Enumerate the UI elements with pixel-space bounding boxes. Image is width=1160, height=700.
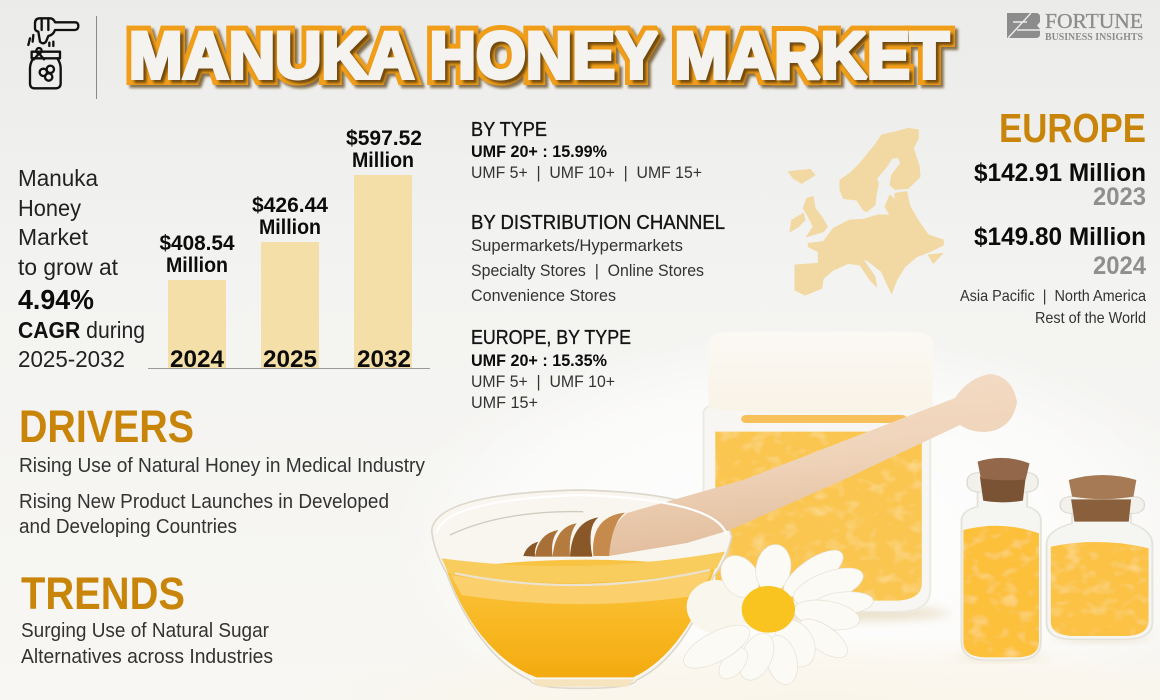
map: Europe (788, 128, 943, 295)
axis (148, 368, 430, 369)
trends heading: TRENDS (21, 568, 185, 619)
growth text block: 2025-2032 (18, 346, 125, 372)
segment: by distribution channel: BY DISTRIBUTION CHANNEL (471, 212, 725, 234)
bar 2032: Million (352, 149, 414, 172)
drivers heading: DRIVERS (19, 401, 194, 452)
glass bowl with honey (437, 495, 727, 687)
growth text block: 4.94% (18, 284, 94, 315)
growth text block: Market (18, 224, 89, 250)
bar 2025: 2025 (263, 346, 317, 373)
logo: Fortune Business Insights: FORTUNE (1045, 9, 1143, 33)
segment: Europe by type: UMF 15+ (471, 393, 538, 412)
drivers text: Rising Use of Natural Honey in Medical Industry (19, 455, 425, 477)
logo: Fortune Business Insights (1007, 9, 1143, 43)
bar 2024 (160, 232, 235, 373)
drivers text: Rising New Product Launches in Developed (19, 491, 389, 513)
icon: honey dipper and jar (28, 18, 78, 88)
growth text block: Honey (18, 195, 81, 221)
drivers text (19, 455, 425, 538)
other regions (960, 288, 1146, 327)
segment: by type: BY TYPE (471, 119, 547, 141)
Europe values: 2024 (1093, 252, 1146, 280)
segment: Europe by type (471, 327, 631, 412)
bar 2024: Million (166, 254, 228, 277)
growth text block (18, 165, 145, 372)
Europe values (974, 159, 1146, 280)
segment: Europe by type: EUROPE, BY TYPE (471, 327, 631, 349)
other regions: Asia Pacific | North America (960, 288, 1146, 305)
small vial right (1047, 475, 1152, 641)
Europe values: $149.80 Million (974, 223, 1146, 251)
other regions: Rest of the World (1035, 310, 1146, 327)
bar 2025 (252, 194, 328, 373)
trends text (21, 620, 273, 668)
bar 2024: 2024 (170, 346, 225, 373)
segment: by type: UMF 5+ | UMF 10+ | UMF 15+ (471, 163, 702, 182)
segment: by distribution channel (471, 212, 725, 305)
glass bowl back (432, 490, 732, 688)
honey dipper (523, 374, 1017, 557)
photo backdrop glow (300, 300, 1160, 700)
daisy flower (677, 542, 874, 688)
bar 2024: $408.54 (160, 232, 235, 255)
segment: by type (471, 119, 702, 182)
bar 2032 (346, 127, 422, 373)
growth text block: Manuka (18, 165, 98, 191)
Europe values: 2023 (1093, 183, 1146, 211)
segment: by distribution channel: Specialty Stores | Online Stores (471, 261, 704, 280)
bar 2025: Million (259, 216, 321, 239)
trends text: Surging Use of Natural Sugar (21, 620, 269, 642)
segment: by distribution channel: Convenience Stores (471, 286, 616, 305)
bar 2032: 2032 (357, 346, 411, 373)
drivers text: and Developing Countries (19, 516, 237, 538)
title: MANUKA HONEY MARKET (129, 18, 949, 92)
large jar (704, 332, 949, 621)
title: MANUKA HONEY MARKET (129, 18, 949, 92)
bar chart (148, 127, 430, 373)
Europe values: $142.91 Million (974, 159, 1146, 187)
photo: jars and vials (704, 332, 1152, 660)
trends text: Alternatives across Industries (21, 646, 273, 668)
title: MANUKA HONEY MARKET (132, 21, 952, 95)
growth text block: to grow at (18, 254, 119, 280)
logo: Fortune Business Insights: BUSINESS INSIGHTS (1045, 32, 1143, 43)
segment: Europe by type: UMF 20+ : 15.35% (471, 351, 607, 370)
segment: by distribution channel: Supermarkets/Hypermarkets (471, 236, 683, 255)
growth text block: CAGR during (18, 317, 145, 343)
bar 2032: $597.52 (346, 127, 422, 150)
title: MANUKA HONEY MARKET (132, 21, 952, 95)
segment: by type: UMF 20+ : 15.99% (471, 142, 607, 161)
divider line (96, 16, 97, 99)
small vial left (959, 458, 1044, 660)
bar 2025: $426.44 (252, 194, 328, 217)
segment: Europe by type: UMF 5+ | UMF 10+ (471, 372, 615, 391)
